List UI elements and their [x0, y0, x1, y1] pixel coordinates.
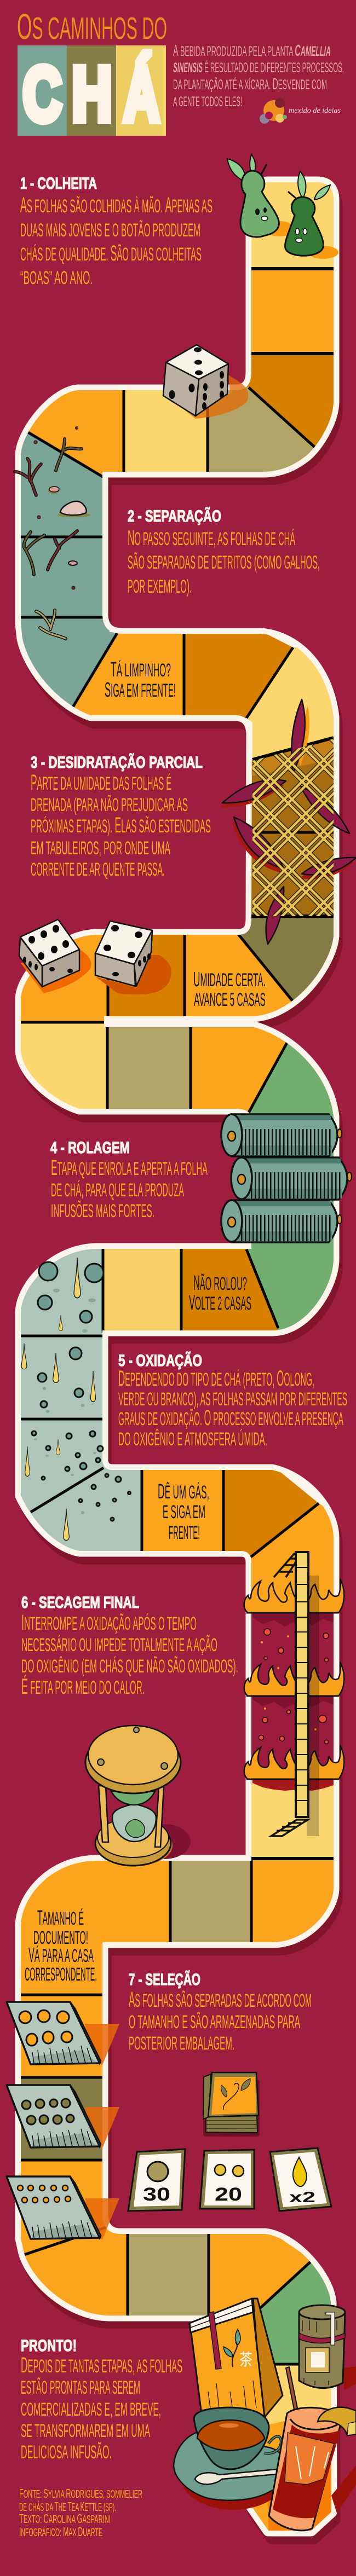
text: rolagem: DE CHÁ, PARA QUE ELA PRODUZA — [51, 1180, 184, 1201]
text: SIGA EM FRENTE! — [105, 679, 176, 702]
board note: não rolou — [189, 1272, 251, 1315]
text: seleção — [129, 1988, 312, 2054]
text: E SIGA EM — [163, 1502, 205, 1523]
credits: FONTE: SYLVIA RODRIGUES, SOMMELIER — [19, 2486, 142, 2500]
intro text: A GENTE TODOS ELES! — [173, 94, 242, 109]
credits: TEXTO: CAROLINA GASPARINI — [19, 2511, 111, 2526]
icon: droplets — [21, 1258, 130, 1541]
icon: card 20: 20 — [215, 2184, 242, 2205]
board note: tamanho é documento — [25, 1907, 97, 1985]
icon: pawns — [227, 154, 338, 259]
title block: chá: C — [23, 51, 61, 137]
heading: pronto: PRONTO! — [21, 2337, 77, 2355]
text: rolagem: INFUSÕES MAIS FORTES. — [51, 1201, 154, 1222]
text: rolagem — [51, 1156, 208, 1222]
text: desidratação parcial — [31, 771, 211, 880]
title: OS CAMINHOS DO — [17, 6, 167, 47]
text: colheita — [20, 193, 213, 288]
icon: leaves and drying tray mesh — [220, 699, 356, 944]
icon: card deck — [203, 2073, 260, 2137]
text: desidratação parcial: EM TABULEIROS, POR ONDE UMA — [31, 838, 170, 859]
icon: tea tin — [299, 2305, 345, 2388]
red cast shadow — [331, 2366, 356, 2513]
text: VOLTE 2 CASAS — [189, 1292, 251, 1315]
board note: dê um gás — [158, 1480, 209, 1543]
text: pronto: COMERCIALIZADAS E, EM BREVE, — [21, 2399, 161, 2420]
icon: cup and saucer — [174, 2407, 286, 2510]
text: colheita: AS FOLHAS SÃO COLHIDAS À MÃO. APENAS AS — [20, 193, 213, 217]
icon: ladder — [271, 1552, 319, 1836]
text: pronto: DELICIOSA INFUSÃO. — [21, 2442, 112, 2463]
text: secagem final: É FEITA POR MEIO DO CALOR. — [21, 1674, 145, 1699]
heading: colheita: 1 - COLHEITA — [20, 175, 97, 193]
icon: sieves — [7, 2002, 119, 2239]
text: separação — [128, 526, 320, 597]
text: AVANCE 5 CASAS — [194, 989, 266, 1010]
heading: desidratação parcial: 3 - DESIDRATAÇÃO PARCIAL — [31, 753, 203, 772]
text: desidratação parcial: PRÓXIMAS ETAPAS). ELAS SÃO ESTENDIDAS — [31, 813, 211, 837]
text: VÁ PARA A CASA — [28, 1944, 94, 1967]
credits: INFOGRÁFICO: MAX DUARTE — [19, 2525, 102, 2539]
icon: rollers — [221, 1114, 352, 1242]
icon: card 20 — [200, 2150, 254, 2209]
heading: rolagem: 4 - ROLAGEM — [50, 1139, 130, 1157]
icon: card x2: x2 — [289, 2189, 315, 2205]
logo: mexido de ideias — [260, 98, 341, 124]
board note: tá limpinho: TÁ LIMPINHO? — [111, 658, 171, 681]
credits: DE CHÁS DA THE TEA KETTLE (SP). — [19, 2499, 116, 2514]
text: oxidação — [118, 1367, 347, 1450]
icon: tea bag package: 茶 — [239, 2351, 252, 2369]
text: desidratação parcial: CORRENTE DE AR QUENTE PASSA. — [31, 859, 165, 880]
icon: hourglass — [85, 1726, 191, 1866]
heading: secagem final: 6 - SECAGEM FINAL — [21, 1594, 139, 1612]
text: colheita: CHÁS DE QUALIDADE. SÃO DUAS COLHEITAS — [20, 241, 202, 265]
heading: separação: 2 - SEPARAÇÃO — [128, 507, 221, 525]
title block: chá: Á — [124, 51, 159, 137]
icon: card 30 — [128, 2149, 185, 2211]
board note: tá limpinho — [105, 658, 176, 702]
title block: chá — [18, 45, 166, 137]
board note: não rolou: NÃO ROLOU? — [193, 1272, 247, 1295]
icon: two dice — [19, 919, 171, 994]
text: DÊ UM GÁS, — [158, 1480, 209, 1503]
board note: umidade certa — [193, 968, 266, 1010]
icon: tea bag package — [190, 2299, 283, 2417]
text: pronto — [21, 2353, 182, 2463]
text: separação: POR EXEMPLO). — [128, 576, 192, 597]
text: UMIDADE CERTA. — [193, 968, 266, 991]
icon: flames and embers — [244, 1579, 344, 1791]
text: pronto: ESTÃO PRONTAS PARA SEREM — [21, 2377, 140, 2398]
text: colheita: “BOAS” AO ANO. — [20, 268, 93, 288]
credits — [19, 2486, 142, 2539]
heading: oxidação: 5 - OXIDAÇÃO — [118, 1351, 202, 1370]
text: pronto: SE TRANSFORMAREM EM UMA — [21, 2421, 150, 2441]
icons: twigs and stones — [15, 427, 90, 639]
board note: tamanho é documento: TAMANHO É — [37, 1907, 84, 1930]
icon: card x2 — [270, 2148, 331, 2211]
board note: tamanho é documento: DOCUMENTO! — [33, 1927, 88, 1948]
logo: mexido de ideias: mexido de ideias — [289, 107, 341, 115]
icon: card 30: 30 — [143, 2184, 170, 2205]
board note: dê um gás: FRENTE! — [169, 1523, 200, 1543]
text: CORRESPONDENTE. — [25, 1964, 97, 1985]
text: desidratação parcial: PARTE DA UMIDADE DAS FOLHAS É — [31, 771, 171, 795]
heading: seleção: 7 - SELEÇÃO — [129, 1970, 200, 1989]
icon: iced tea glass — [269, 2367, 356, 2531]
title block: chá: H — [72, 51, 112, 137]
text: secagem final — [21, 1611, 238, 1699]
intro text — [173, 42, 344, 109]
icon: die on first corner — [163, 345, 248, 419]
